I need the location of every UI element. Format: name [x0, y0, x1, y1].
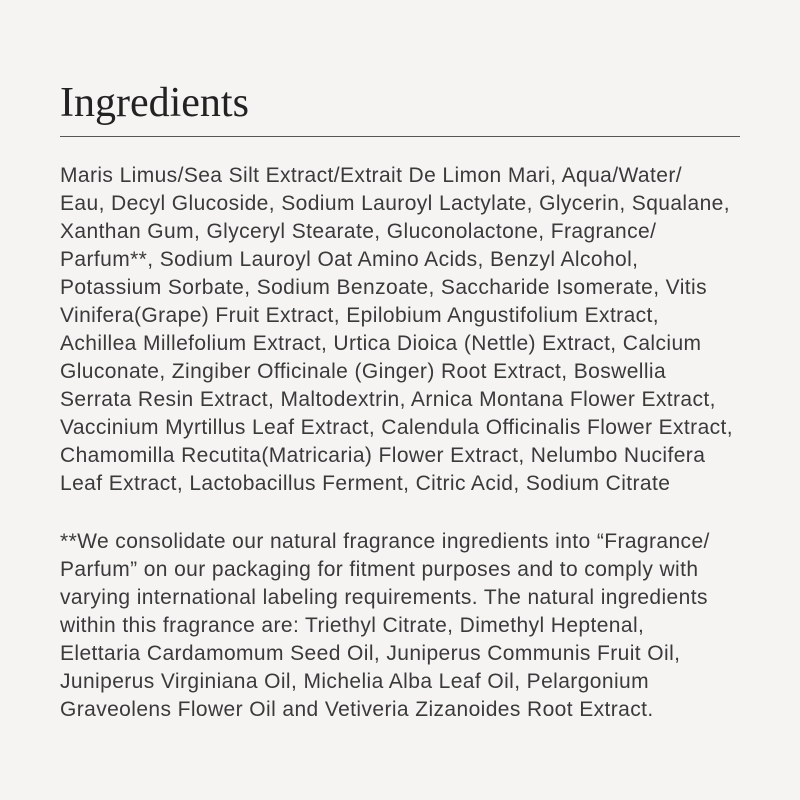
text block: ingredient list — [60, 164, 733, 495]
text block: fragrance footnote: varying international labeling requirements. The natural ingredients — [60, 586, 708, 609]
text block: fragrance footnote: Graveolens Flower Oil and Vetiveria Zizanoides Root Extract. — [60, 698, 654, 721]
title: Ingredients — [60, 80, 249, 126]
text block: ingredient list: Achillea Millefolium Extract, Urtica Dioica (Nettle) Extract, Calcium — [60, 332, 701, 355]
text block: ingredient list: Parfum**, Sodium Lauroyl Oat Amino Acids, Benzyl Alcohol, — [60, 248, 638, 271]
text block: ingredient list: Maris Limus/Sea Silt Extract/Extrait De Limon Mari, Aqua/Water/ — [60, 164, 682, 187]
text block: ingredient list: Serrata Resin Extract, Maltodextrin, Arnica Montana Flower Extract, — [60, 388, 716, 411]
text block: ingredient list: Gluconate, Zingiber Officinale (Ginger) Root Extract, Boswellia — [60, 360, 666, 383]
text block: ingredient list: Leaf Extract, Lactobacillus Ferment, Citric Acid, Sodium Citrate — [60, 472, 670, 495]
text block: ingredient list: Vinifera(Grape) Fruit Extract, Epilobium Angustifolium Extract, — [60, 304, 659, 327]
text block: ingredient list: Xanthan Gum, Glyceryl Stearate, Gluconolactone, Fragrance/ — [60, 220, 656, 243]
text block: fragrance footnote: Juniperus Virginiana Oil, Michelia Alba Leaf Oil, Pelargonium — [60, 670, 649, 693]
text block: ingredient list: Chamomilla Recutita(Matricaria) Flower Extract, Nelumbo Nucifera — [60, 444, 705, 467]
text block: fragrance footnote: Elettaria Cardamomum Seed Oil, Juniperus Communis Fruit Oil, — [60, 642, 680, 665]
text block: ingredient list: Vaccinium Myrtillus Leaf Extract, Calendula Officinalis Flower Extract, — [60, 416, 733, 439]
text block: ingredient list: Eau, Decyl Glucoside, Sodium Lauroyl Lactylate, Glycerin, Squalane, — [60, 192, 730, 215]
text block: ingredient list: Potassium Sorbate, Sodium Benzoate, Saccharide Isomerate, Vitis — [60, 276, 707, 299]
text block: fragrance footnote: Parfum” on our packaging for fitment purposes and to comply with — [60, 558, 698, 581]
text block: fragrance footnote: **We consolidate our natural fragrance ingredients into “Fragrance/ — [60, 530, 710, 553]
text block: fragrance footnote — [60, 530, 710, 721]
text block: fragrance footnote: within this fragrance are: Triethyl Citrate, Dimethyl Heptenal, — [60, 614, 644, 637]
